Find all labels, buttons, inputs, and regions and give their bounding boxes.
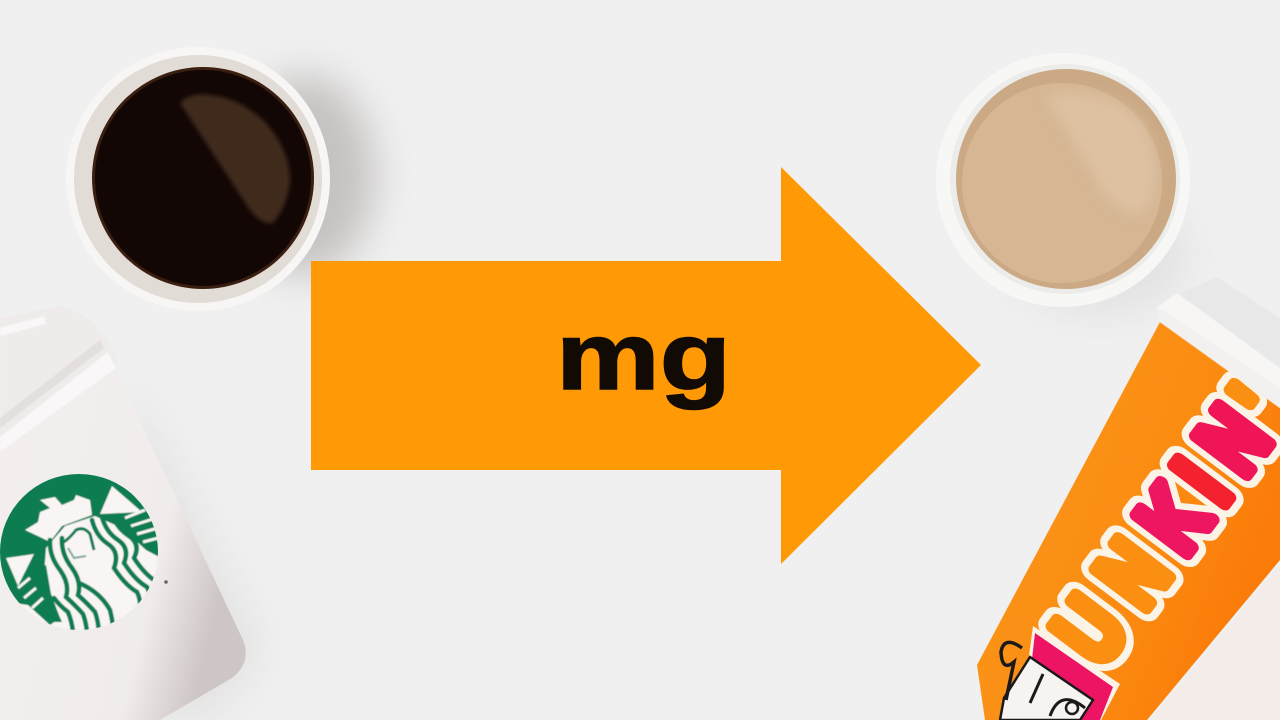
logo hair: [50, 516, 157, 632]
panel: black coffee cup: [66, 47, 375, 311]
icon: green siren logo: [0, 470, 165, 632]
brand text: U: [1034, 579, 1146, 681]
cup body: [977, 322, 1280, 720]
cup lid: [1157, 277, 1280, 408]
panel: latte coffee cup: [956, 69, 1180, 308]
cup lid: [0, 306, 118, 452]
arrow: [311, 167, 981, 564]
logo crown: [25, 495, 92, 542]
brand wordmark: [1000, 369, 1280, 720]
brand text: K: [1118, 468, 1230, 570]
panel: orange takeaway cup: [977, 277, 1280, 720]
logo green field: [0, 470, 165, 625]
cup body: [0, 362, 246, 720]
brand text: N: [1077, 523, 1189, 625]
brand badge: D: [1000, 626, 1120, 720]
panel: white takeaway cup with green logo: [0, 306, 265, 720]
brand text: I: [1155, 443, 1249, 520]
logo face: [62, 529, 94, 550]
label: mg: mg: [556, 303, 731, 410]
